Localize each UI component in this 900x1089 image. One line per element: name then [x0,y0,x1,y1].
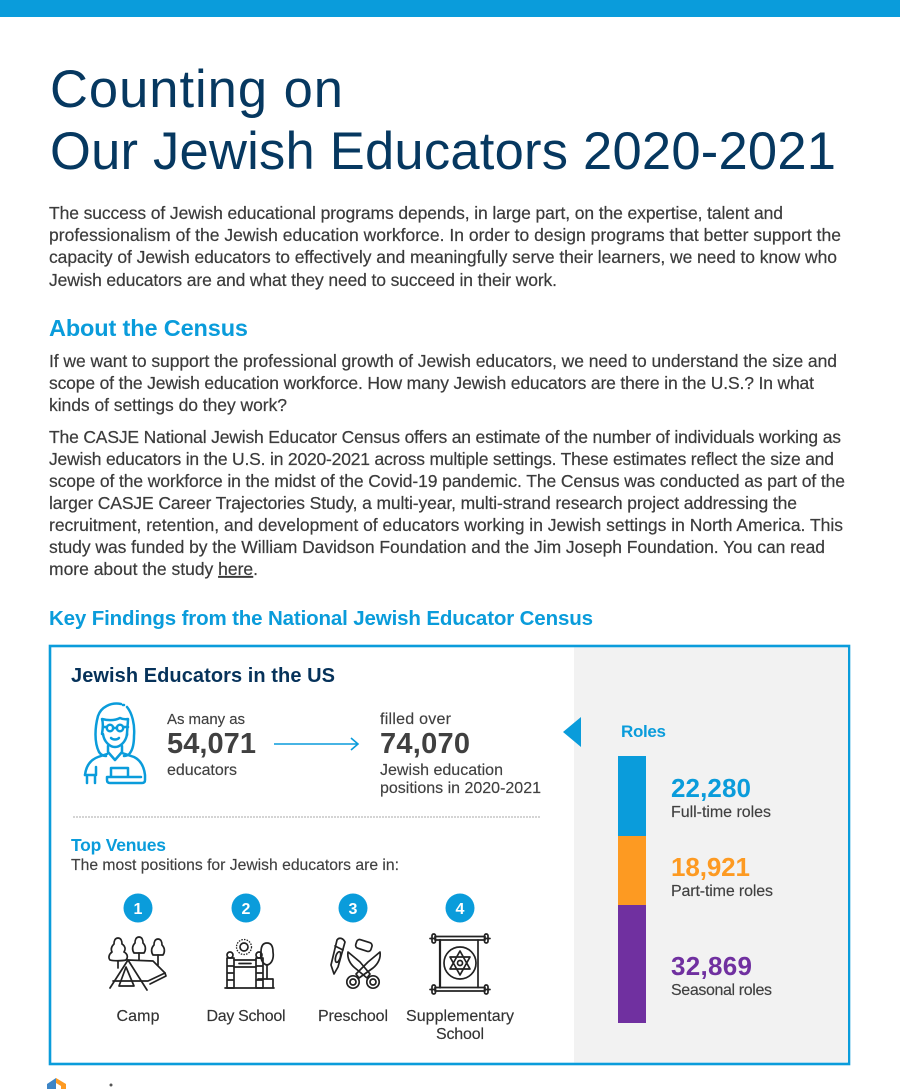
stat: 54,071 educators: As many as [167,711,245,728]
arrow: educators to positions [274,738,358,750]
stat: seasonal roles [671,951,772,999]
intro paragraph: capacity of Jewish educators to effectively and meaningfully serve their learners, we need to know who [49,247,837,267]
number badge 4 [446,894,474,922]
paragraph: census description [49,427,845,579]
pointer arrow toward roles [563,717,581,747]
number badge 1: 1 [134,901,143,918]
stat: 74,070 positions: positions in 2020-2021 [380,780,541,797]
stat: part-time roles: 18,921 [671,852,750,882]
icon: camp tent and trees [109,937,166,990]
stat: 74,070 positions [380,711,541,797]
panel: roles background [574,648,848,1062]
stat: seasonal roles: Seasonal roles [671,982,772,999]
intro paragraph: The success of Jewish educational programs depends, in large part, on the expertise, talent and [49,203,783,223]
icon: scroll with star of David [430,934,490,994]
paragraph: census description: recruitment, retention, and development of educators working in Jewish settings in North America. This [49,515,843,535]
stat: part-time roles: Part-time roles [671,883,773,900]
footer logo, cropped at page edge [47,1078,112,1089]
stat: 54,071 educators: 54,071 [167,728,256,760]
stat: full-time roles: 22,280 [671,773,751,803]
label: Supplementary School: School [436,1026,484,1043]
panel heading: Jewish Educators in the US: Jewish Educators in the US [71,665,335,687]
label: Camp: Camp [116,1008,160,1025]
paragraph: census description: scope of the workforce in the midst of the Covid-19 pandemic. The Census was conducted as part of the [49,471,845,491]
intro paragraph: professionalism of the Jewish education workforce. In order to design programs that better support the [49,225,841,245]
venue 2: day school [206,894,286,1025]
paragraph: why the census: kinds of settings do they work? [49,395,287,415]
title [50,60,836,181]
icon: day school gate [225,940,274,988]
stat: 74,070 positions: filled over [380,711,452,728]
paragraph: why the census: scope of the Jewish education workforce. How many Jewish educators are there in the U.S.? In what [49,373,814,393]
stat: 74,070 positions: Jewish education [380,762,503,779]
label: Supplementary School: Supplementary [406,1008,514,1025]
icon: educator [85,704,145,783]
heading: Roles: Roles [621,722,666,741]
panel: key findings box [50,646,849,1064]
number badge 2: 2 [242,901,251,918]
paragraph: census description: larger CASJE Career Trajectories Study, a multi-year, multi-strand research project addressing the [49,493,797,513]
label: Preschool: Preschool [318,1008,388,1025]
stacked bar chart: roles [618,756,646,1023]
paragraph: census description: study was funded by the William Davidson Foundation and the Jim Joseph Foundation. You can read [49,537,825,557]
stat: 74,070 positions: 74,070 [380,728,470,760]
paragraph: census description: The CASJE National Jewish Educator Census offers an estimate of the number of individuals working as [49,427,841,447]
label: Day School: Day School [206,1008,286,1025]
top banner [0,0,900,17]
paragraph: why the census [49,351,837,415]
paragraph: why the census: If we want to support the professional growth of Jewish educators, we need to understand the size and [49,351,837,371]
venue 4: supplementary school [406,894,514,1043]
text: top venues intro: The most positions for Jewish educators are in: [71,857,399,874]
venue 1: camp [109,894,166,1025]
heading: Top Venues: Top Venues [71,835,166,855]
number badge 4: 4 [456,901,465,918]
stat: full-time roles: Full-time roles [671,804,771,821]
intro paragraph: Jewish educators are and what they need to succeed in their work. [49,270,557,290]
stat: seasonal roles: 32,869 [671,951,752,981]
stat: 54,071 educators [167,711,256,779]
paragraph: census description: more about the study here. [49,559,258,579]
stat: part-time roles [671,852,773,900]
paragraph: census description: Jewish educators in the U.S. in 2020-2021 across multiple settings. These estimates reflect the size and [49,449,834,469]
intro paragraph [49,203,841,290]
title: Counting on [50,60,343,119]
stat: full-time roles [671,773,771,821]
label: Supplementary School [406,1008,514,1043]
heading: Key Findings: Key Findings from the National Jewish Educator Census [49,607,593,630]
title: Our Jewish Educators 2020-2021 [50,122,836,181]
venue 3: preschool [318,894,388,1025]
stat: 54,071 educators: educators [167,762,237,779]
heading: About the Census: About the Census [49,315,248,341]
number badge 3: 3 [349,901,358,918]
icon: crayon, eraser and scissors [331,938,380,988]
